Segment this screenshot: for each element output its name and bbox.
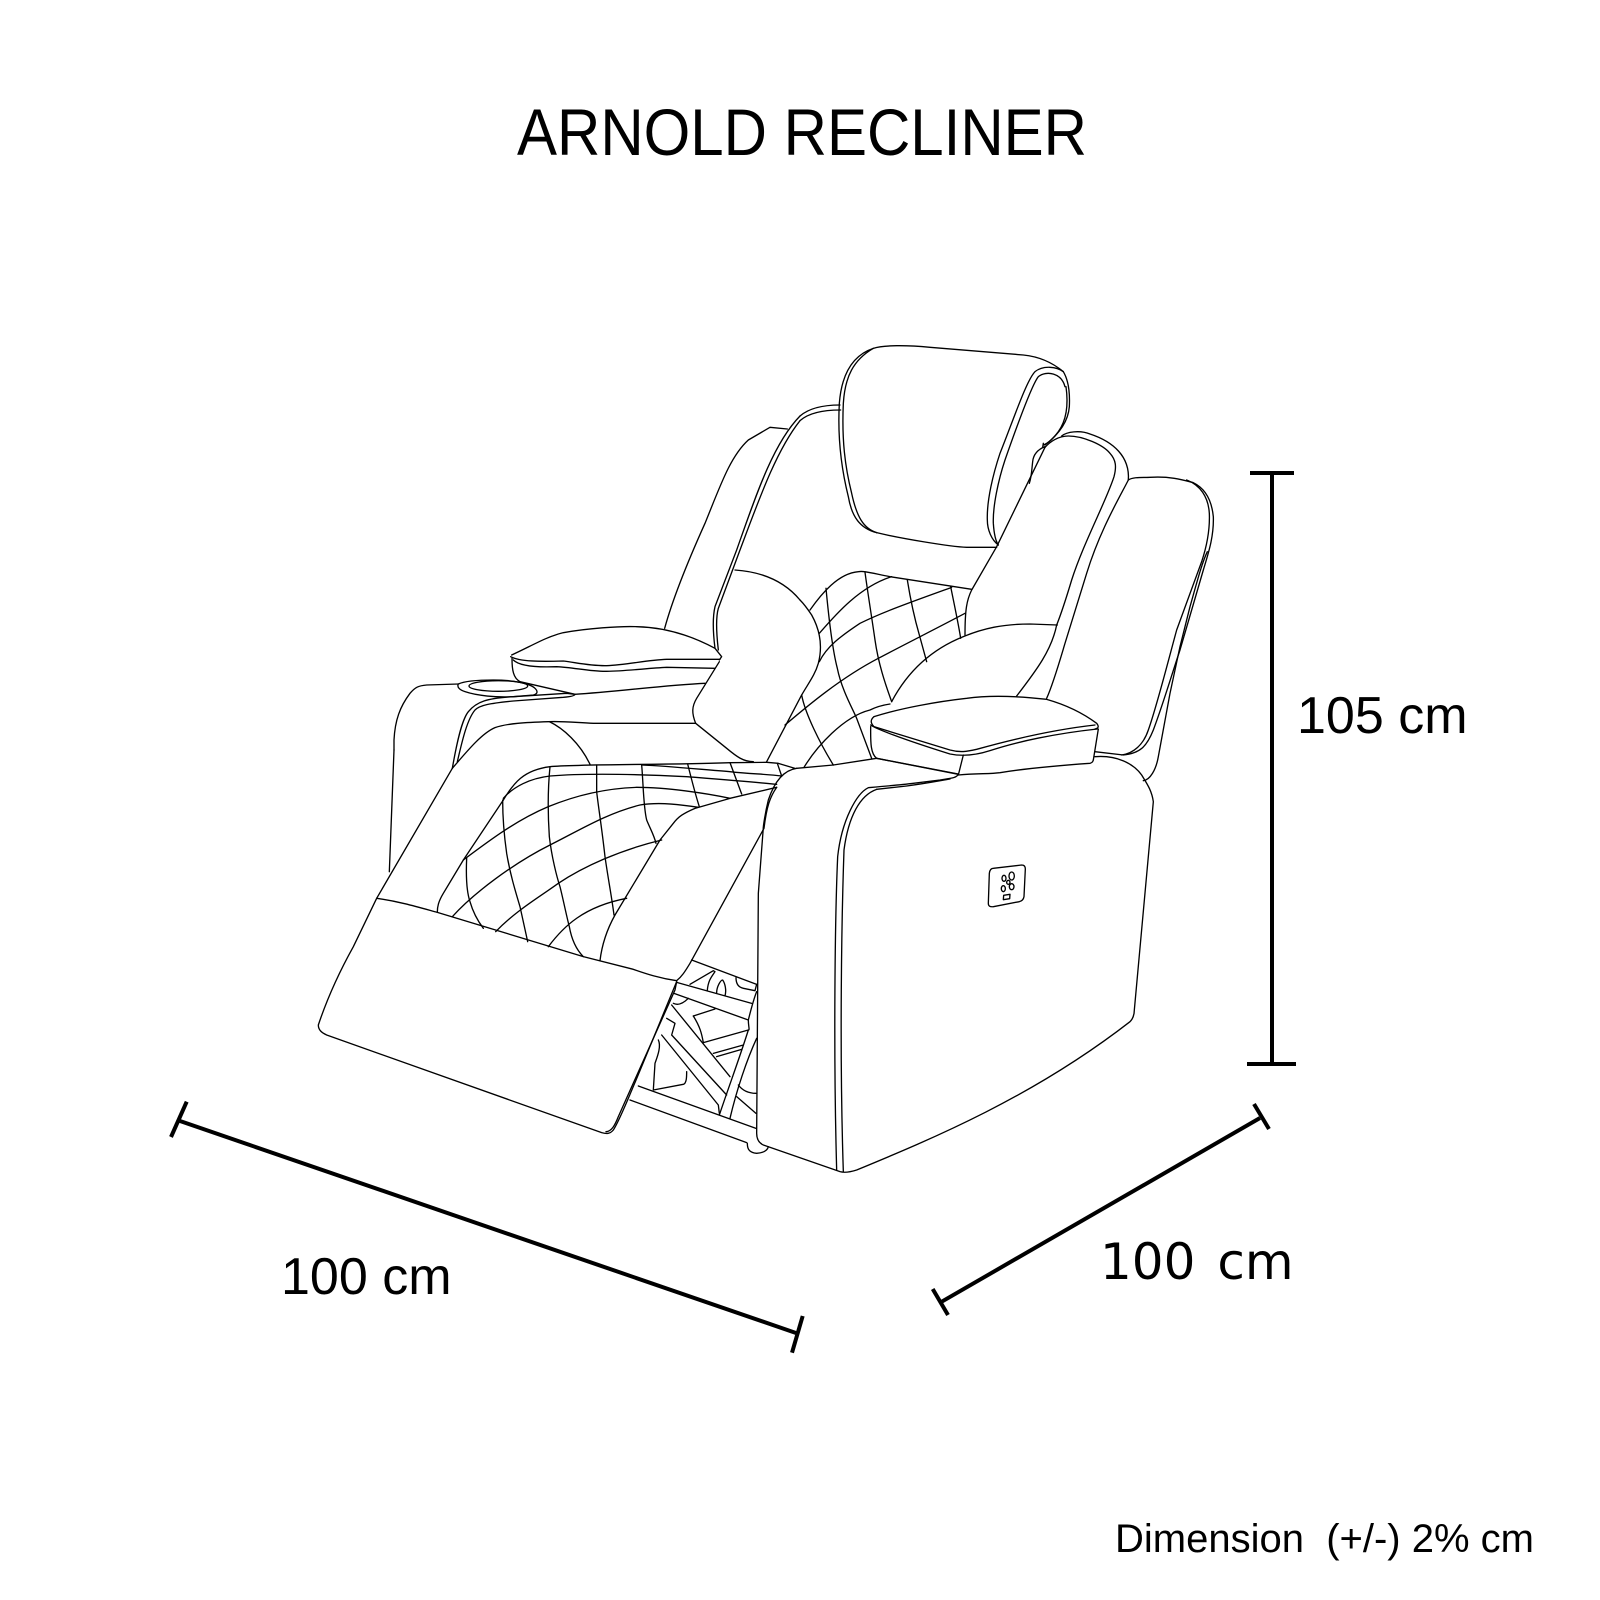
title: ARNOLD RECLINER (517, 95, 1087, 169)
tolerance note: Dimension (+/-) 2% cm (1115, 1517, 1534, 1561)
seat quilting, footrest and mechanism (318, 750, 795, 1153)
left back wing, arm pad and cup holder (394, 416, 800, 768)
height dimension arrow (1247, 473, 1296, 1064)
icon: control switch (988, 865, 1025, 907)
depth dimension arrow (933, 1104, 1269, 1315)
width dimension arrow (171, 1102, 803, 1353)
footrest (318, 768, 677, 1133)
height label: 105 cm (1297, 687, 1468, 745)
depth label: 100 cm (1100, 1233, 1294, 1291)
recliner mechanism (630, 960, 768, 1153)
headrest, back cushions, right wing and right arm pad (767, 346, 1213, 781)
back quilting (785, 571, 972, 767)
chair illustration (318, 346, 1213, 1172)
width label: 100 cm (281, 1248, 452, 1306)
right arm front panel (757, 756, 1153, 1172)
